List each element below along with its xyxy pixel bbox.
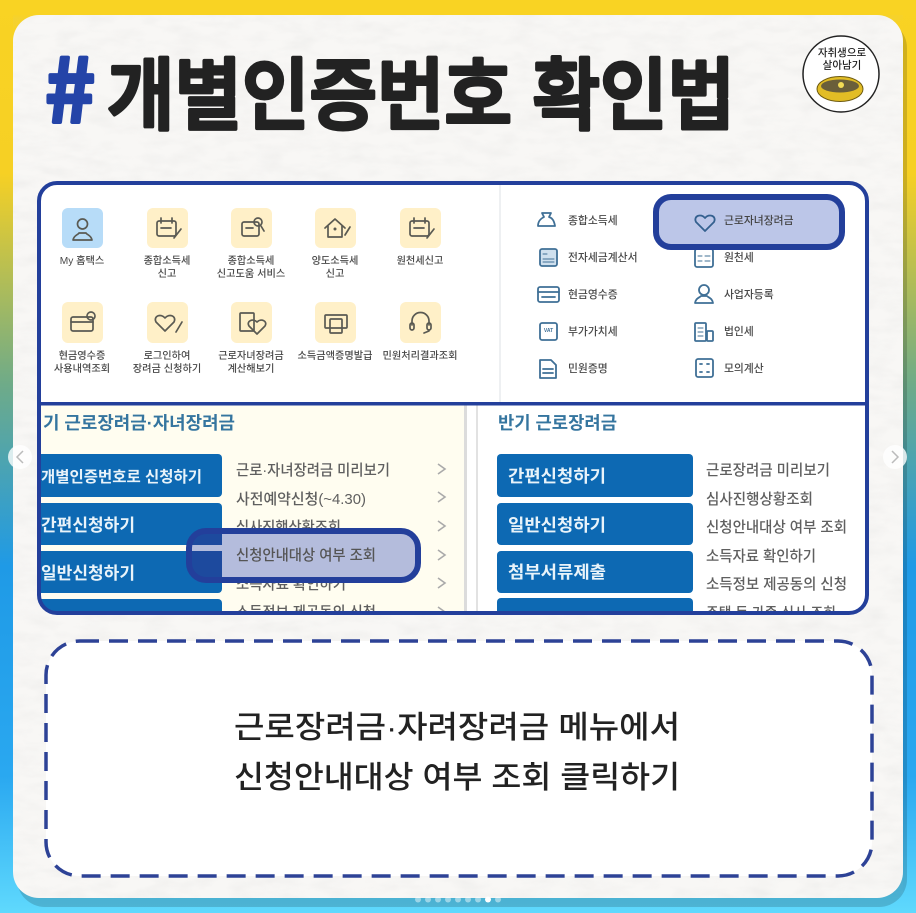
list: right service links: 심사진행상황조회	[706, 491, 813, 508]
shortcut: My 홈택스	[60, 208, 104, 267]
menu: 원천세: 원천세	[724, 250, 754, 264]
button: 일반신청하기	[497, 503, 693, 545]
menu: 종합소득세	[538, 213, 618, 227]
button: 일반신청하기: 일반신청하기	[41, 564, 135, 583]
shortcut: 현금영수증 사용내역조회: 사용내역조회	[54, 362, 110, 375]
menu: 민원증명: 민원증명	[568, 361, 608, 375]
list: left service links	[236, 462, 445, 621]
menu: 현금영수증	[538, 287, 618, 302]
logo badge	[803, 36, 879, 112]
list: left service links: 사전예약신청(~4.30)	[236, 491, 366, 508]
shortcut: 원천세신고: 원천세신고	[397, 254, 443, 267]
shortcut: My 홈택스: My 홈택스	[60, 254, 104, 267]
shortcut: 종합소득세 신고도움 서비스: 신고도움 서비스	[217, 268, 285, 280]
button: 간편신청하기: 간편신청하기	[508, 467, 606, 486]
button: partially hidden	[497, 598, 693, 611]
shortcut: 민원처리결과조회	[383, 302, 457, 362]
bottom right white section	[476, 405, 847, 628]
title	[45, 21, 735, 148]
shortcut: 종합소득세 신고	[144, 208, 190, 280]
menu: 민원증명	[540, 360, 608, 378]
shortcut: 로그인하여 장려금 신청하기: 로그인하여	[144, 349, 190, 362]
top vertical divider	[499, 183, 501, 403]
menu: 사업자등록	[695, 285, 774, 303]
list: right service links: 근로장려금 미리보기	[706, 462, 830, 479]
shortcut: 민원처리결과조회: 민원처리결과조회	[383, 349, 457, 362]
button: 간편신청하기	[497, 454, 693, 497]
shortcut: 현금영수증 사용내역조회	[54, 302, 110, 375]
highlight: 신청안내대상 여부 조회	[189, 531, 418, 580]
title text: 개별인증번호 확인법	[107, 33, 735, 146]
screenshot panel	[20, 183, 867, 629]
panel middle line	[39, 402, 867, 406]
button: 일반신청하기	[41, 551, 222, 593]
dashed text box	[46, 641, 872, 876]
button: 첨부서류제출: 첨부서류제출	[508, 563, 606, 582]
menu: 종합소득세: 종합소득세	[568, 213, 618, 227]
menu: 전자세금계산서	[540, 249, 638, 266]
button: 일반신청하기: 일반신청하기	[508, 516, 606, 535]
shortcut: 양도소득세 신고: 양도소득세	[312, 254, 358, 267]
highlight: 신청안내대상 여부 조회: 신청안내대상 여부 조회	[236, 547, 376, 564]
top left shortcut grid	[54, 208, 457, 375]
menu: 부가가치세	[540, 323, 618, 340]
shortcut: 종합소득세 신고도움 서비스: 종합소득세	[228, 254, 274, 267]
shortcut: 양도소득세 신고: 신고	[326, 268, 344, 280]
title hash mark: #	[45, 21, 95, 148]
menu: 모의계산: 모의계산	[724, 361, 764, 375]
carousel page dots	[415, 896, 501, 902]
menu: 전자세금계산서: 전자세금계산서	[568, 250, 638, 264]
button: 간편신청하기: 간편신청하기	[41, 516, 135, 535]
carousel previous button	[8, 445, 32, 469]
section heading: 근로장려금 자녀장려금: 기 근로장려금·자녀장려금	[43, 413, 235, 433]
menu: 원천세	[695, 249, 754, 267]
logo badge: 자취생으로	[818, 47, 866, 59]
carousel next button	[883, 445, 907, 469]
instruction text	[234, 710, 680, 795]
menu: 부가가치세: 부가가치세	[568, 325, 618, 338]
shortcut: 소득금액증명발급	[298, 302, 372, 362]
menu: 모의계산	[696, 359, 764, 377]
shortcut: 근로자녀장려금 계산해보기: 근로자녀장려금	[218, 349, 284, 362]
shortcut: 근로자녀장려금 계산해보기	[218, 302, 284, 375]
shortcut: 원천세신고	[397, 208, 443, 267]
section heading: 반기 근로장려금: 반기 근로장려금	[498, 413, 617, 433]
button: 간편신청하기	[41, 503, 222, 545]
list: right service links	[706, 462, 847, 622]
list: right service links: 신청안내대상 여부 조회	[706, 519, 847, 536]
list: left service links: 소득정보 제공동의 신청	[236, 604, 376, 621]
list: left service links: 소득자료 확인하기	[236, 576, 346, 593]
button: partially hidden	[42, 599, 222, 611]
highlight: 근로자녀장려금: 근로자녀장려금	[724, 214, 794, 227]
menu: 사업자등록: 사업자등록	[724, 288, 774, 301]
shortcut: 소득금액증명발급: 소득금액증명발급	[298, 349, 372, 362]
shortcut: 현금영수증 사용내역조회: 현금영수증	[59, 349, 105, 362]
panel border	[39, 183, 867, 613]
shortcut: 종합소득세 신고: 신고	[158, 268, 176, 280]
menu: 법인세	[695, 323, 754, 341]
menu: 현금영수증: 현금영수증	[568, 288, 618, 301]
button: 첨부서류제출	[497, 551, 693, 593]
shortcut: 근로자녀장려금 계산해보기: 계산해보기	[228, 362, 274, 375]
list: left service links: 근로·자녀장려금 미리보기	[236, 462, 390, 479]
bottom left cream section	[20, 405, 467, 629]
shortcut: 양도소득세 신고	[312, 208, 358, 280]
list: right service links: 소득자료 확인하기	[706, 548, 816, 565]
shortcut: 종합소득세 신고도움 서비스	[217, 208, 285, 280]
logo badge: 살아남기	[823, 60, 861, 72]
button: 개별인증번호로 신청하기	[41, 454, 222, 497]
shortcut: 종합소득세 신고: 종합소득세	[144, 254, 190, 267]
list: right service links: 주택 등 가족 심사 조회	[706, 605, 836, 622]
menu: 법인세: 법인세	[724, 325, 754, 338]
shortcut: 로그인하여 장려금 신청하기: 장려금 신청하기	[133, 362, 201, 375]
highlight: 근로자녀장려금	[656, 197, 842, 247]
list: right service links: 소득정보 제공동의 신청	[706, 576, 847, 593]
instruction text: 신청안내대상 여부 조회 클릭하기	[234, 760, 680, 795]
list: left service links: 심사진행상황조회	[236, 519, 341, 536]
button: 개별인증번호로 신청하기: 개별인증번호로 신청하기	[41, 468, 202, 486]
shortcut: 로그인하여 장려금 신청하기	[133, 302, 201, 375]
top right tax menu	[538, 213, 774, 378]
instruction text: 근로장려금·자려장려금 메뉴에서	[234, 710, 680, 745]
menu: 부가가치세: VAT	[544, 328, 553, 334]
